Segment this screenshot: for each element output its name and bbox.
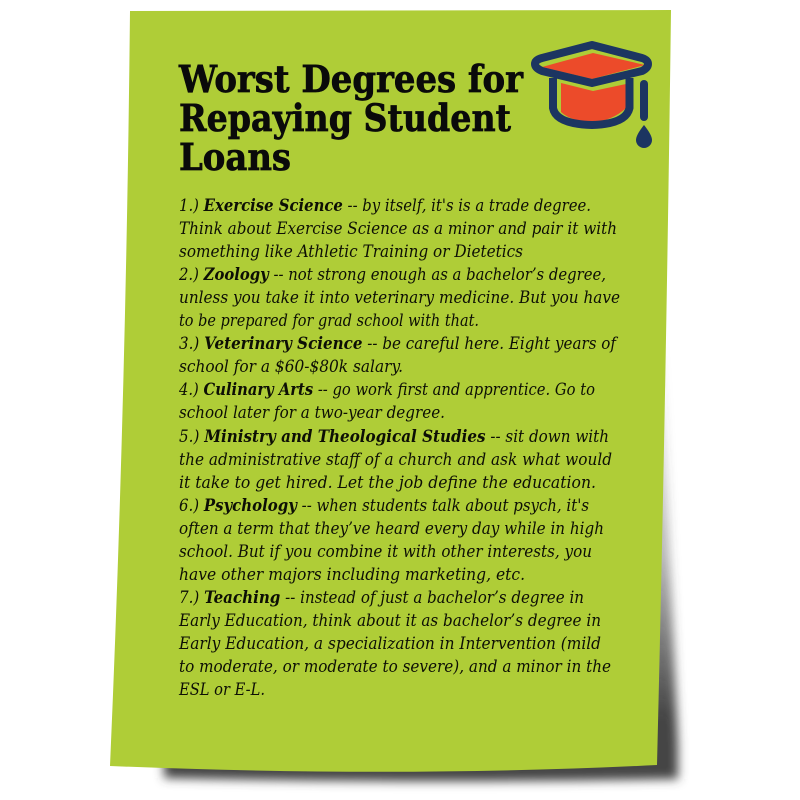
item 5: Ministry and Theological Studies <box>179 426 612 492</box>
item 1: Exercise Science <box>179 195 617 261</box>
item 2: Zoology: unless you take it into veterinary medicine. But you have <box>179 288 620 307</box>
item 7: Teaching: Early Education, a specialization in Intervention (mild <box>178 634 601 653</box>
icon: graduation cap <box>535 45 652 148</box>
item 7: Teaching: ESL or E-L. <box>178 680 265 699</box>
item 2: Zoology <box>178 264 620 330</box>
title: Repaying Student <box>179 96 511 140</box>
item 7: Teaching: 7.) Teaching -- instead of just a bachelor’s degree in <box>179 587 584 607</box>
item 6: Psychology: have other majors including marketing, etc. <box>179 565 525 584</box>
item 4: Culinary Arts: 4.) Culinary Arts -- go work first and apprentice. Go to <box>178 379 595 399</box>
item 3: Veterinary Science <box>179 333 619 376</box>
item 6: Psychology: often a term that they’ve heard every day while in high <box>179 519 604 538</box>
title: Worst Degrees for <box>178 57 523 101</box>
item 7: Teaching: to moderate, or moderate to severe), and a minor in the <box>179 657 611 676</box>
item 5: Ministry and Theological Studies: the administrative staff of a church and ask what would <box>179 450 612 469</box>
item 1: Exercise Science: Think about Exercise Science as a minor and pair it with <box>179 219 617 238</box>
item 1: Exercise Science: 1.) Exercise Science -- by itself, it's is a trade degree. <box>179 195 591 215</box>
item 4: Culinary Arts <box>178 379 595 422</box>
item 2: Zoology: to be prepared for grad school with that. <box>179 311 479 330</box>
text block: list of degrees <box>178 195 620 699</box>
paper drop shadow <box>164 320 678 781</box>
item 5: Ministry and Theological Studies: 5.) Ministry and Theological Studies -- sit down with <box>179 426 609 446</box>
panel: green paper sheet <box>110 10 671 772</box>
item 6: Psychology: school. But if you combine it with other interests, you <box>179 542 592 561</box>
item 7: Teaching <box>178 587 611 699</box>
item 4: Culinary Arts: school later for a two-year degree. <box>179 403 445 422</box>
item 7: Teaching: Early Education, think about it as bachelor’s degree in <box>178 611 601 630</box>
title <box>178 57 523 179</box>
title: Loans <box>179 135 291 179</box>
item 3: Veterinary Science: school for a $60-$80k salary. <box>179 357 403 376</box>
item 6: Psychology <box>179 495 604 584</box>
item 2: Zoology: 2.) Zoology -- not strong enough as a bachelor’s degree, <box>178 264 606 284</box>
item 5: Ministry and Theological Studies: it take to get hired. Let the job define the education. <box>179 473 596 492</box>
item 6: Psychology: 6.) Psychology -- when students talk about psych, it's <box>179 495 589 515</box>
item 3: Veterinary Science: 3.) Veterinary Science -- be careful here. Eight years of <box>179 333 619 353</box>
item 1: Exercise Science: something like Athletic Training or Dietetics <box>179 242 523 261</box>
